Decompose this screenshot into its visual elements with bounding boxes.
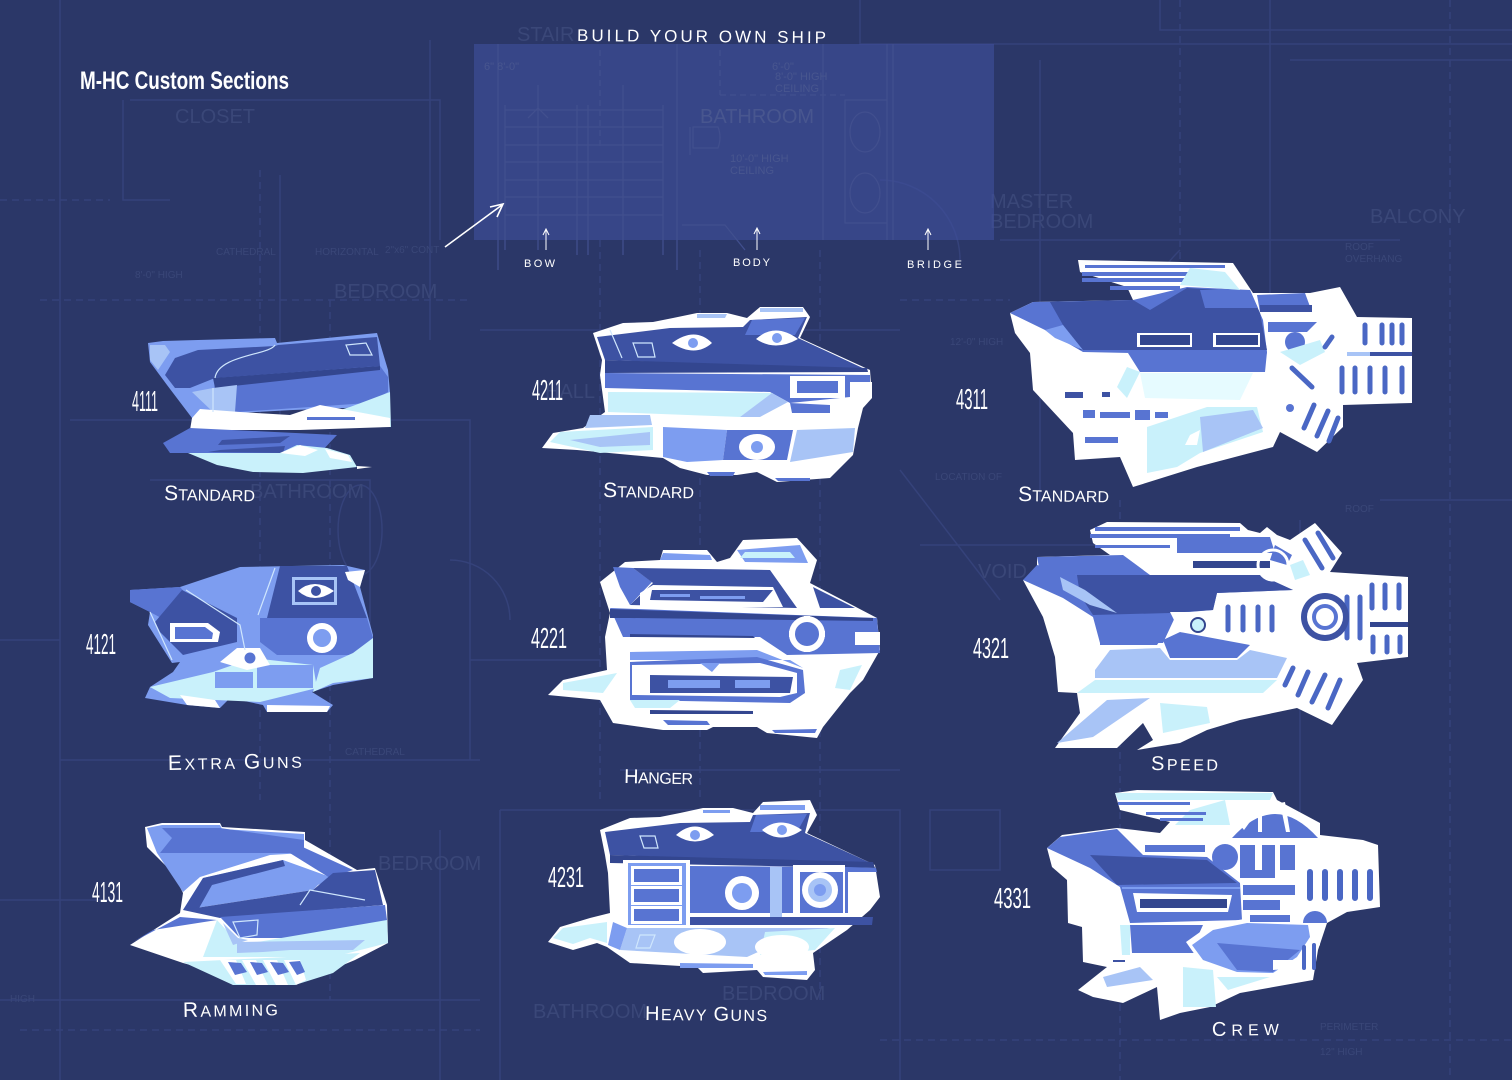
blueprint background labels: 12'-0" HIGH — [950, 337, 1003, 348]
label: bridge — [907, 229, 962, 271]
ship 4221 hanger — [548, 538, 880, 738]
build area panel: 6'-0" — [772, 61, 794, 73]
text: 4131 — [92, 877, 123, 909]
build area panel: CEILING — [730, 165, 774, 177]
label: bow: BOW — [524, 258, 556, 270]
blueprint background labels: MASTER — [990, 191, 1073, 213]
ship 4311 standard — [1010, 260, 1412, 487]
label heavy guns: HEAVY GUNS — [645, 1003, 767, 1026]
text: 4211 — [532, 375, 563, 407]
blueprint background labels: BEDROOM — [378, 853, 481, 875]
blueprint background labels: LOCATION OF — [935, 472, 1002, 483]
label standard: STANDARD — [1018, 483, 1109, 507]
blueprint background labels: BEDROOM — [334, 281, 437, 303]
blueprint background labels: CATHEDRAL — [345, 747, 405, 758]
blueprint background labels: HIGH — [10, 994, 35, 1005]
blueprint background labels: STAIR — [517, 24, 574, 46]
build area panel: BATHROOM — [700, 106, 814, 128]
text: 4111 — [132, 386, 158, 418]
blueprint background labels: 8'-0" HIGH — [135, 270, 183, 281]
arrow: pointer to build area — [445, 204, 503, 247]
blueprint background labels: ROOF — [1345, 242, 1374, 253]
ship 4231 heavy guns — [548, 800, 880, 980]
blueprint background labels: VOID — [978, 561, 1027, 583]
build area panel: 10'-0" HIGH — [730, 153, 789, 165]
number 4231: 4231 — [548, 862, 584, 894]
blueprint background labels: CLOSET — [175, 106, 255, 128]
blueprint background labels: PERIMETER — [1320, 1022, 1378, 1033]
label: body: BODY — [733, 257, 771, 269]
label crew: C REW — [1212, 1018, 1280, 1041]
label hanger: HANGER — [624, 766, 693, 789]
ship 4211 standard — [542, 307, 872, 482]
build area panel: CEILING — [775, 83, 819, 95]
build area panel: 8'-0" HIGH — [775, 71, 828, 83]
label standard: STANDARD — [603, 479, 694, 503]
build area panel — [474, 44, 994, 270]
ship 4321 speed — [1023, 522, 1408, 750]
blueprint background labels: BEDROOM — [990, 211, 1093, 233]
blueprint background labels: ROOF — [1345, 504, 1374, 515]
number 4311: 4311 — [956, 384, 988, 416]
number 4331: 4331 — [994, 883, 1031, 915]
number 4221: 4221 — [531, 623, 567, 655]
ship 4111 standard — [148, 333, 391, 473]
blueprint background labels: HORIZONTAL — [315, 247, 379, 258]
blueprint background labels: CATHEDRAL — [216, 247, 276, 258]
label extra guns: EXTRA GUNS — [168, 750, 302, 775]
label standard: STANDARD — [164, 482, 255, 506]
blueprint background labels: 2"x6" CONT — [385, 245, 439, 256]
build area panel: 6" 8'-0" — [484, 61, 519, 73]
label: body — [733, 228, 771, 269]
ship 4331 crew — [1047, 790, 1380, 1020]
label speed: SPEED — [1151, 753, 1218, 776]
blueprint background labels: BALCONY — [1370, 206, 1466, 228]
number 4321: 4321 — [973, 633, 1009, 665]
label: bow — [524, 229, 556, 270]
label ramming: RAMMING — [183, 997, 278, 1022]
blueprint background labels: OVERHANG — [1345, 254, 1402, 265]
ship 4121 extra guns — [130, 565, 373, 712]
ship 4131 ramming — [130, 823, 388, 985]
blueprint background labels: BEDROOM — [722, 983, 825, 1005]
label: bridge: BRIDGE — [907, 259, 962, 271]
title: M-HC Custom Sections — [80, 67, 289, 95]
text: 4121 — [86, 629, 116, 661]
heading: build your own ship: BUILD YOUR OWN SHIP — [577, 26, 826, 47]
blueprint background labels: BATHROOM — [533, 1001, 647, 1023]
blueprint background labels: 12" HIGH — [1320, 1047, 1362, 1058]
blueprint background labels: BATHROOM — [250, 481, 364, 503]
blueprint background labels: HALL — [545, 381, 595, 403]
